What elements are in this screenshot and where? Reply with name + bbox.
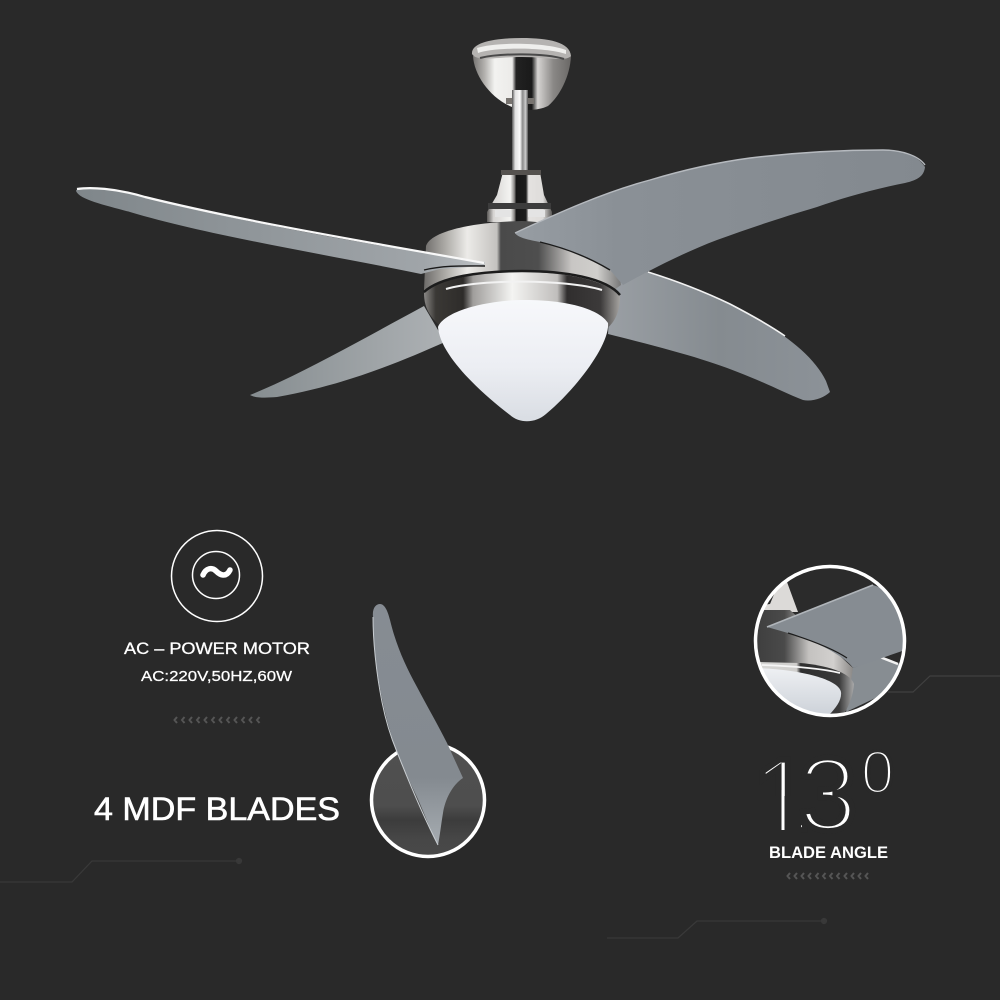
blades heading: 4 MDF BLADES	[94, 791, 340, 827]
blade detail circle	[372, 604, 484, 856]
blade angle value: 3	[799, 737, 857, 853]
motor heading: AC – POWER MOTOR	[124, 639, 310, 658]
detail: rear blade	[846, 658, 899, 712]
detail: housing	[755, 610, 853, 680]
detail: trim ring	[755, 662, 854, 714]
blade angle value: 0	[861, 739, 894, 806]
chevron row left	[174, 717, 260, 723]
motor specification: AC:220V,50HZ,60W	[141, 669, 292, 685]
motor coupling	[487, 170, 552, 222]
ceiling fan product	[76, 38, 925, 421]
lamp glass	[438, 300, 608, 421]
AC motor icon	[172, 530, 262, 622]
blade: upper left	[76, 188, 485, 274]
circuit line upper right	[888, 676, 1000, 692]
circuit line left	[0, 858, 242, 882]
chevron row right	[788, 873, 868, 879]
trim ring	[424, 271, 620, 330]
motor housing	[424, 221, 621, 300]
blade: lower right	[608, 262, 830, 401]
downrod	[512, 90, 528, 175]
ceiling canopy	[472, 38, 571, 110]
blade: lower left	[250, 306, 445, 398]
blade angle detail circle	[755, 565, 905, 716]
detail: coupling	[764, 582, 798, 612]
blade angle value	[753, 737, 894, 853]
blade: upper right	[515, 150, 925, 285]
blade angle value: 1	[753, 738, 810, 852]
blade angle label: BLADE ANGLE	[769, 844, 888, 862]
detail: glass	[762, 668, 842, 714]
detail: front blade	[767, 585, 905, 668]
circuit line bottom right	[607, 918, 826, 938]
